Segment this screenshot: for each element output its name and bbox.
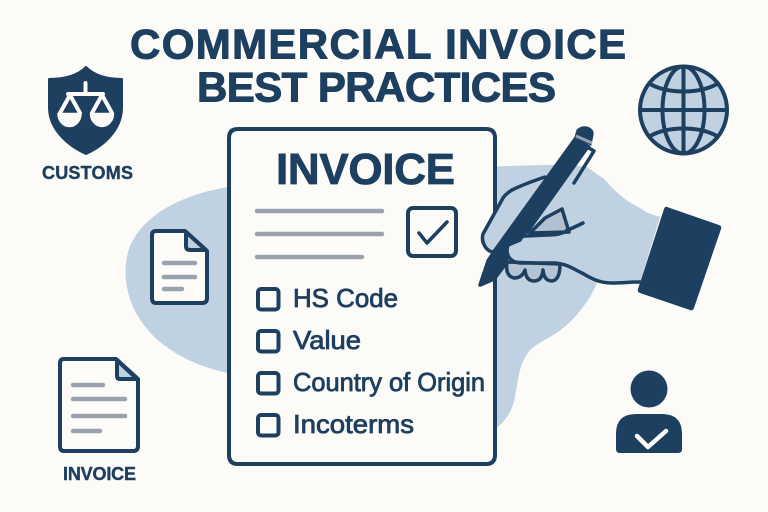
thumb and wrist line [507, 223, 640, 283]
invoice label: INVOICE [63, 464, 136, 484]
customs label: CUSTOMS [42, 163, 133, 183]
approval checkbox [408, 208, 456, 256]
checklist item: Incoterms: Incoterms [293, 409, 414, 439]
card text lines [257, 211, 382, 257]
icon: small document [152, 231, 207, 303]
checklist item: Value: Value [293, 325, 361, 355]
panel: invoice card [229, 129, 495, 464]
fingers [507, 262, 560, 281]
icon: globe [640, 66, 727, 154]
palm shade [530, 209, 569, 233]
card heading: INVOICE [276, 145, 455, 194]
checklist item: HS Code: HS Code [293, 283, 398, 313]
checklist item: Value [258, 325, 361, 355]
background blob [126, 165, 660, 427]
title: COMMERCIAL INVOICE [130, 20, 626, 68]
checklist item: Country of Origin: Country of Origin [293, 367, 485, 397]
pen [479, 127, 594, 286]
title [130, 20, 626, 110]
title: BEST PRACTICES [197, 64, 556, 110]
illustration: hand writing with pen [479, 127, 721, 310]
sleeve cuff [638, 207, 721, 310]
icon: customs shield [49, 67, 122, 154]
index finger outline [482, 177, 550, 252]
icon: verified person [616, 370, 682, 453]
icon: large document [60, 359, 138, 451]
